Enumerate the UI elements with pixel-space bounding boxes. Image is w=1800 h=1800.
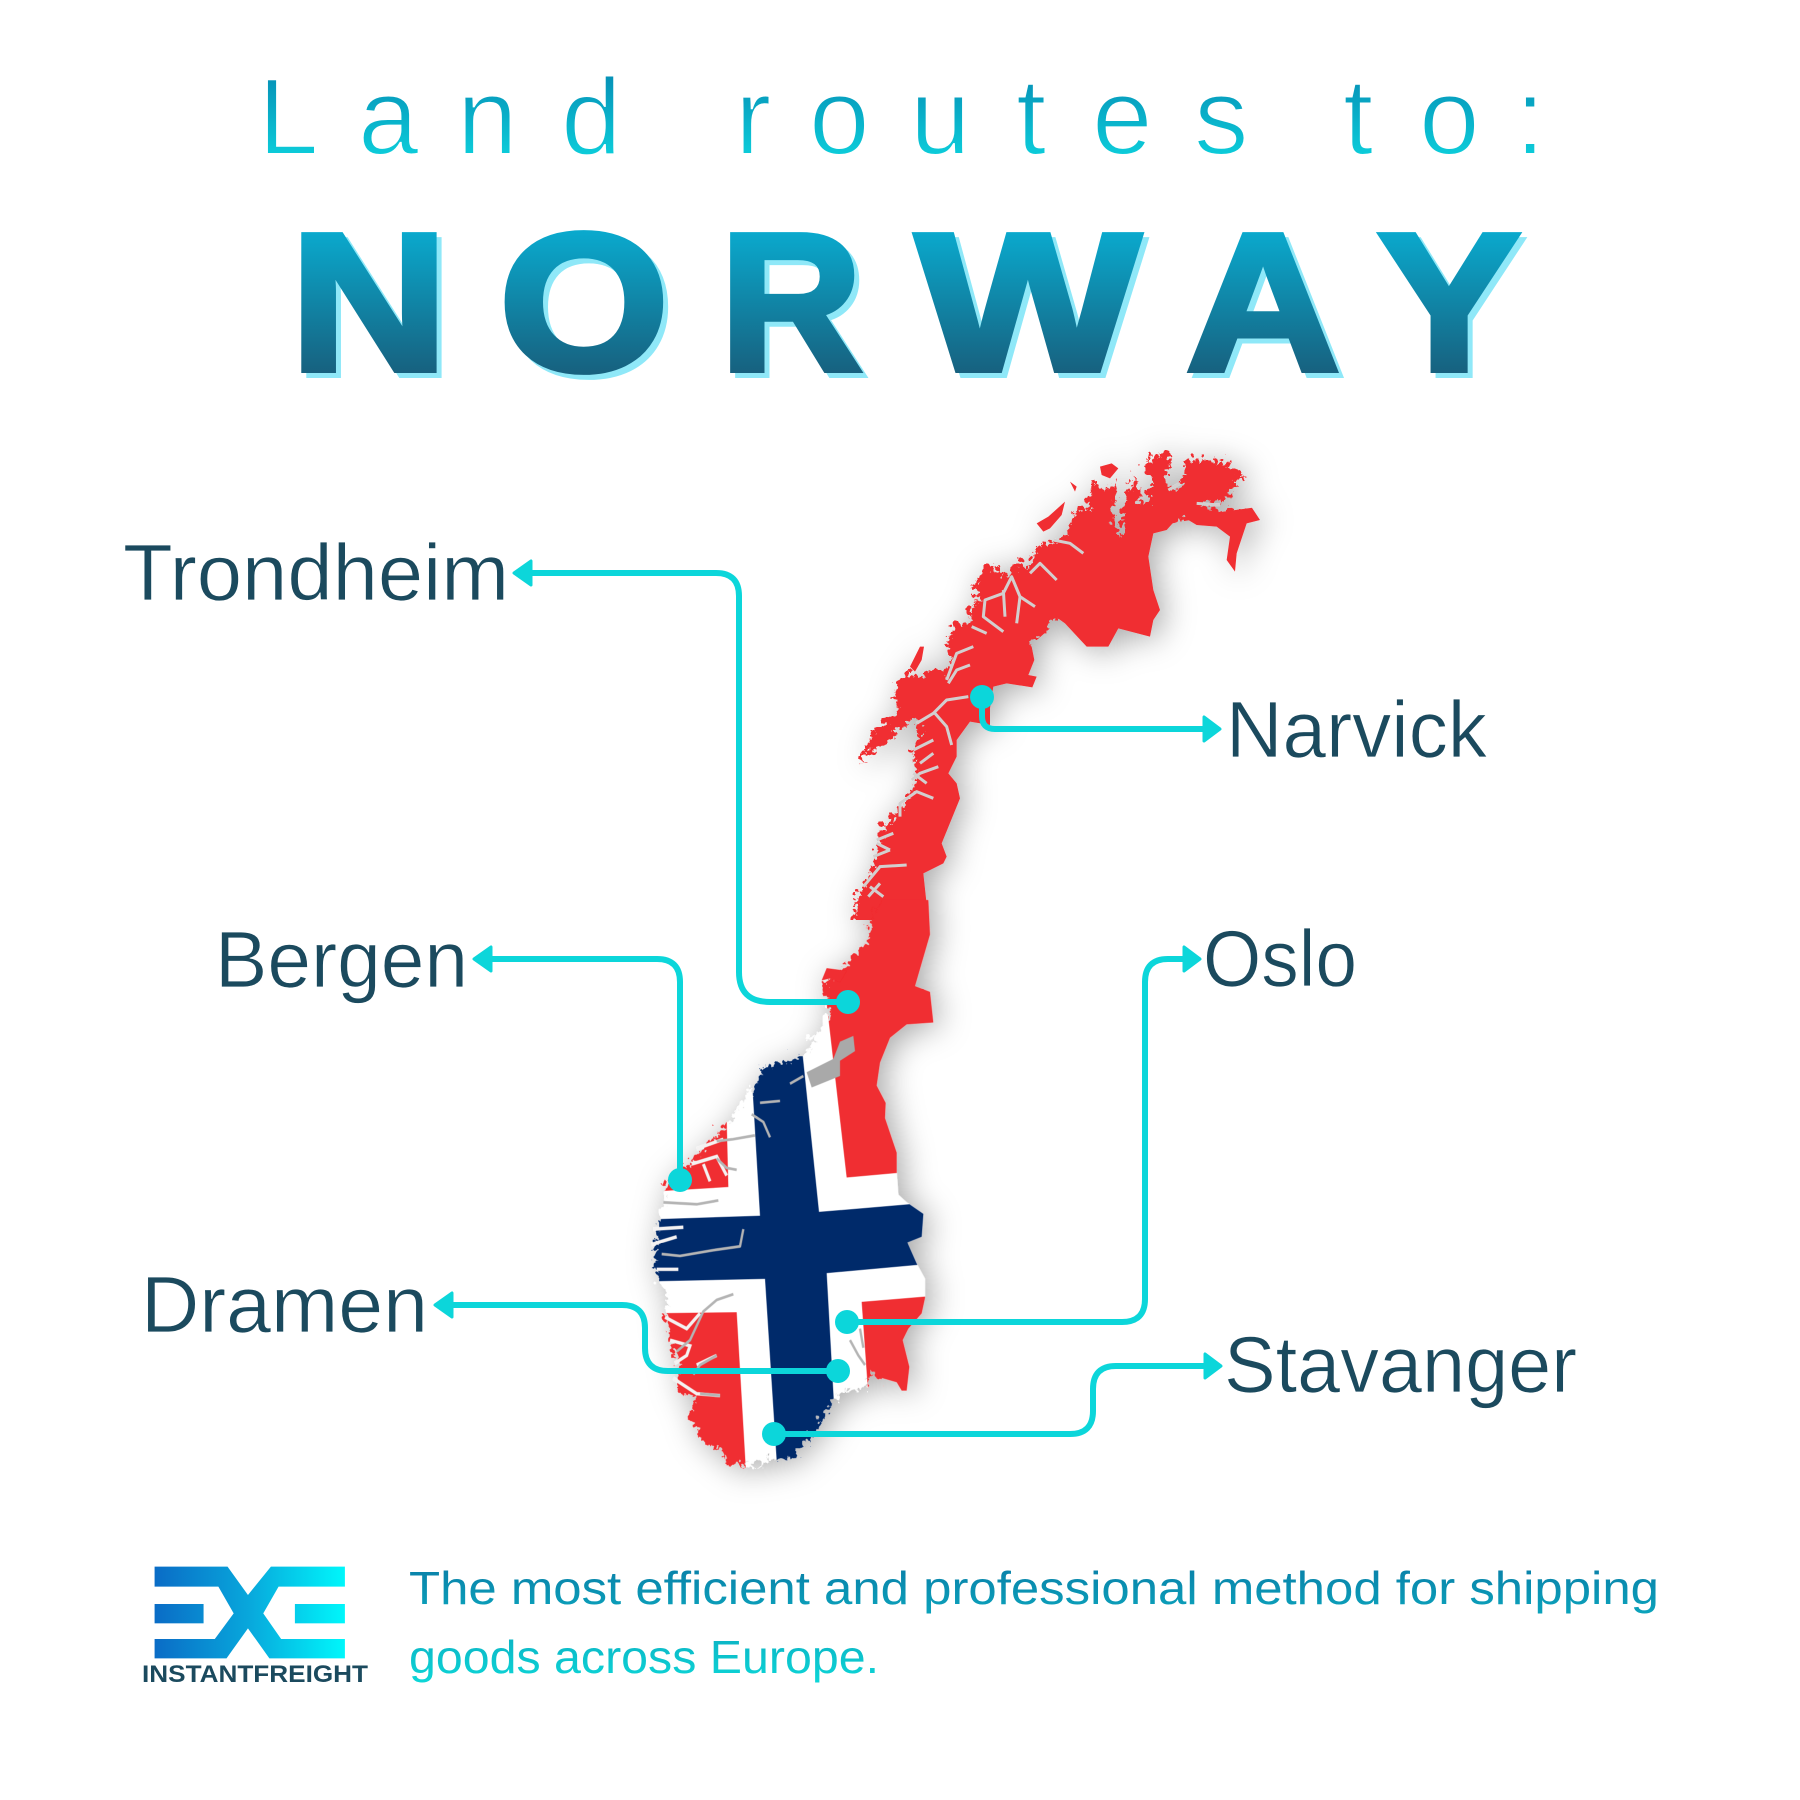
flag navy cross: [651, 1049, 924, 1462]
heading: NORWAY: [290, 193, 1525, 417]
connector: Oslo: [835, 947, 1200, 1334]
red coastal island: [822, 968, 847, 982]
southern fjords: [662, 1076, 865, 1396]
label: Stavanger: Stavanger: [1224, 1320, 1577, 1409]
map of Norway with flag: [641, 443, 1274, 1488]
heading shadow: A: [1191, 198, 1345, 417]
logo wordmark: INSTANTFREIGHT: [142, 1661, 368, 1688]
connector: Stavanger: [762, 1354, 1221, 1446]
connector: Bergen: [474, 947, 692, 1192]
tagline: [409, 1562, 1659, 1683]
logo mark: [155, 1567, 345, 1658]
heading shadow: N: [295, 198, 453, 417]
heading shadow: [295, 198, 1525, 417]
heading letters: O: [499, 193, 669, 412]
heading shadow: Y: [1383, 198, 1525, 417]
label: Trondheim: Trondheim: [123, 528, 509, 617]
white coastal cuts: [652, 1139, 727, 1396]
tagline: The most efficient and professional method for shipping: [409, 1562, 1659, 1614]
label: Oslo: Oslo: [1203, 914, 1357, 1003]
heading letters: A: [1186, 193, 1340, 412]
heading letters: Y: [1378, 193, 1520, 412]
heading shadow: W: [921, 198, 1145, 417]
heading letters: N: [290, 193, 448, 412]
logo: InstantFreight: [142, 1567, 368, 1688]
heading letters: R: [720, 193, 862, 412]
fjords: [863, 483, 1220, 897]
heading shadow: R: [725, 198, 867, 417]
heading shadow: O: [504, 198, 674, 417]
title: Land routes to: Land routes to:: [258, 56, 1545, 178]
heading letters: W: [916, 193, 1140, 412]
lake: [807, 1036, 855, 1088]
label: Bergen: Bergen: [215, 915, 468, 1004]
connector: Dramen: [435, 1293, 850, 1383]
map: northern Norway in red: [844, 443, 1274, 937]
heading letters: [290, 193, 1520, 412]
tagline: goods across Europe.: [409, 1631, 879, 1683]
flag white cross: [654, 1005, 926, 1470]
label: Dramen: Dramen: [141, 1260, 428, 1349]
connector: Narvick: [970, 685, 1220, 741]
map: southern Norway flag fill: [641, 900, 955, 1488]
connector: Trondheim: [514, 561, 860, 1014]
label: Narvick: Narvick: [1226, 685, 1488, 774]
